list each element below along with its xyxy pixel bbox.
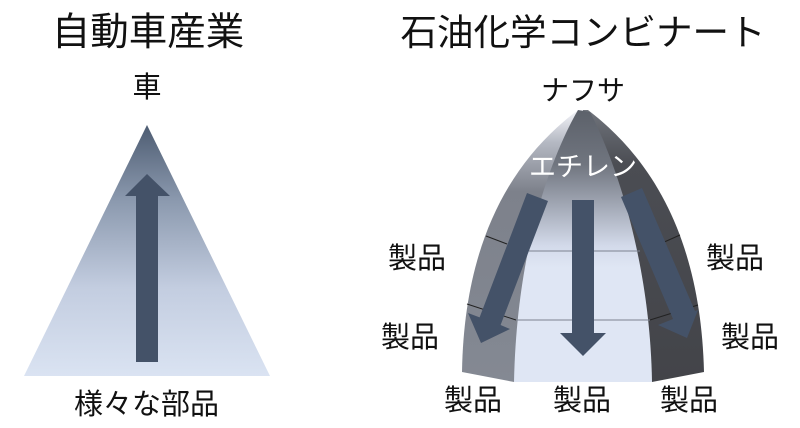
dome tier lines — [467, 235, 698, 320]
arrow: left — [468, 193, 548, 343]
label: various parts: 様々な部品 — [74, 388, 219, 421]
pyramid triangle — [24, 125, 270, 376]
label: car: 車 — [132, 71, 162, 104]
dome left segment — [462, 110, 583, 382]
arrow: right — [621, 188, 698, 338]
title: automotive industry: 自動車産業 — [52, 11, 244, 54]
product label: bottom right: 製品 — [660, 384, 718, 417]
product label: right lower: 製品 — [721, 321, 779, 354]
dome center segment — [514, 110, 652, 382]
product label: bottom left: 製品 — [444, 384, 502, 417]
arrow: center — [560, 200, 606, 356]
product label: left lower: 製品 — [381, 321, 439, 354]
pyramid diagram — [24, 125, 270, 376]
title: petrochemical complex: 石油化学コンビナート — [400, 12, 766, 53]
product labels — [381, 242, 779, 417]
label: ethylene: エチレン — [529, 152, 637, 182]
product label: left upper: 製品 — [388, 242, 446, 275]
dome right segment — [583, 110, 704, 382]
product label: right upper: 製品 — [706, 242, 764, 275]
label: naphtha: ナフサ — [541, 75, 625, 106]
dome diagram — [462, 110, 704, 382]
product label: bottom center: 製品 — [553, 384, 611, 417]
upward arrow — [125, 174, 170, 362]
